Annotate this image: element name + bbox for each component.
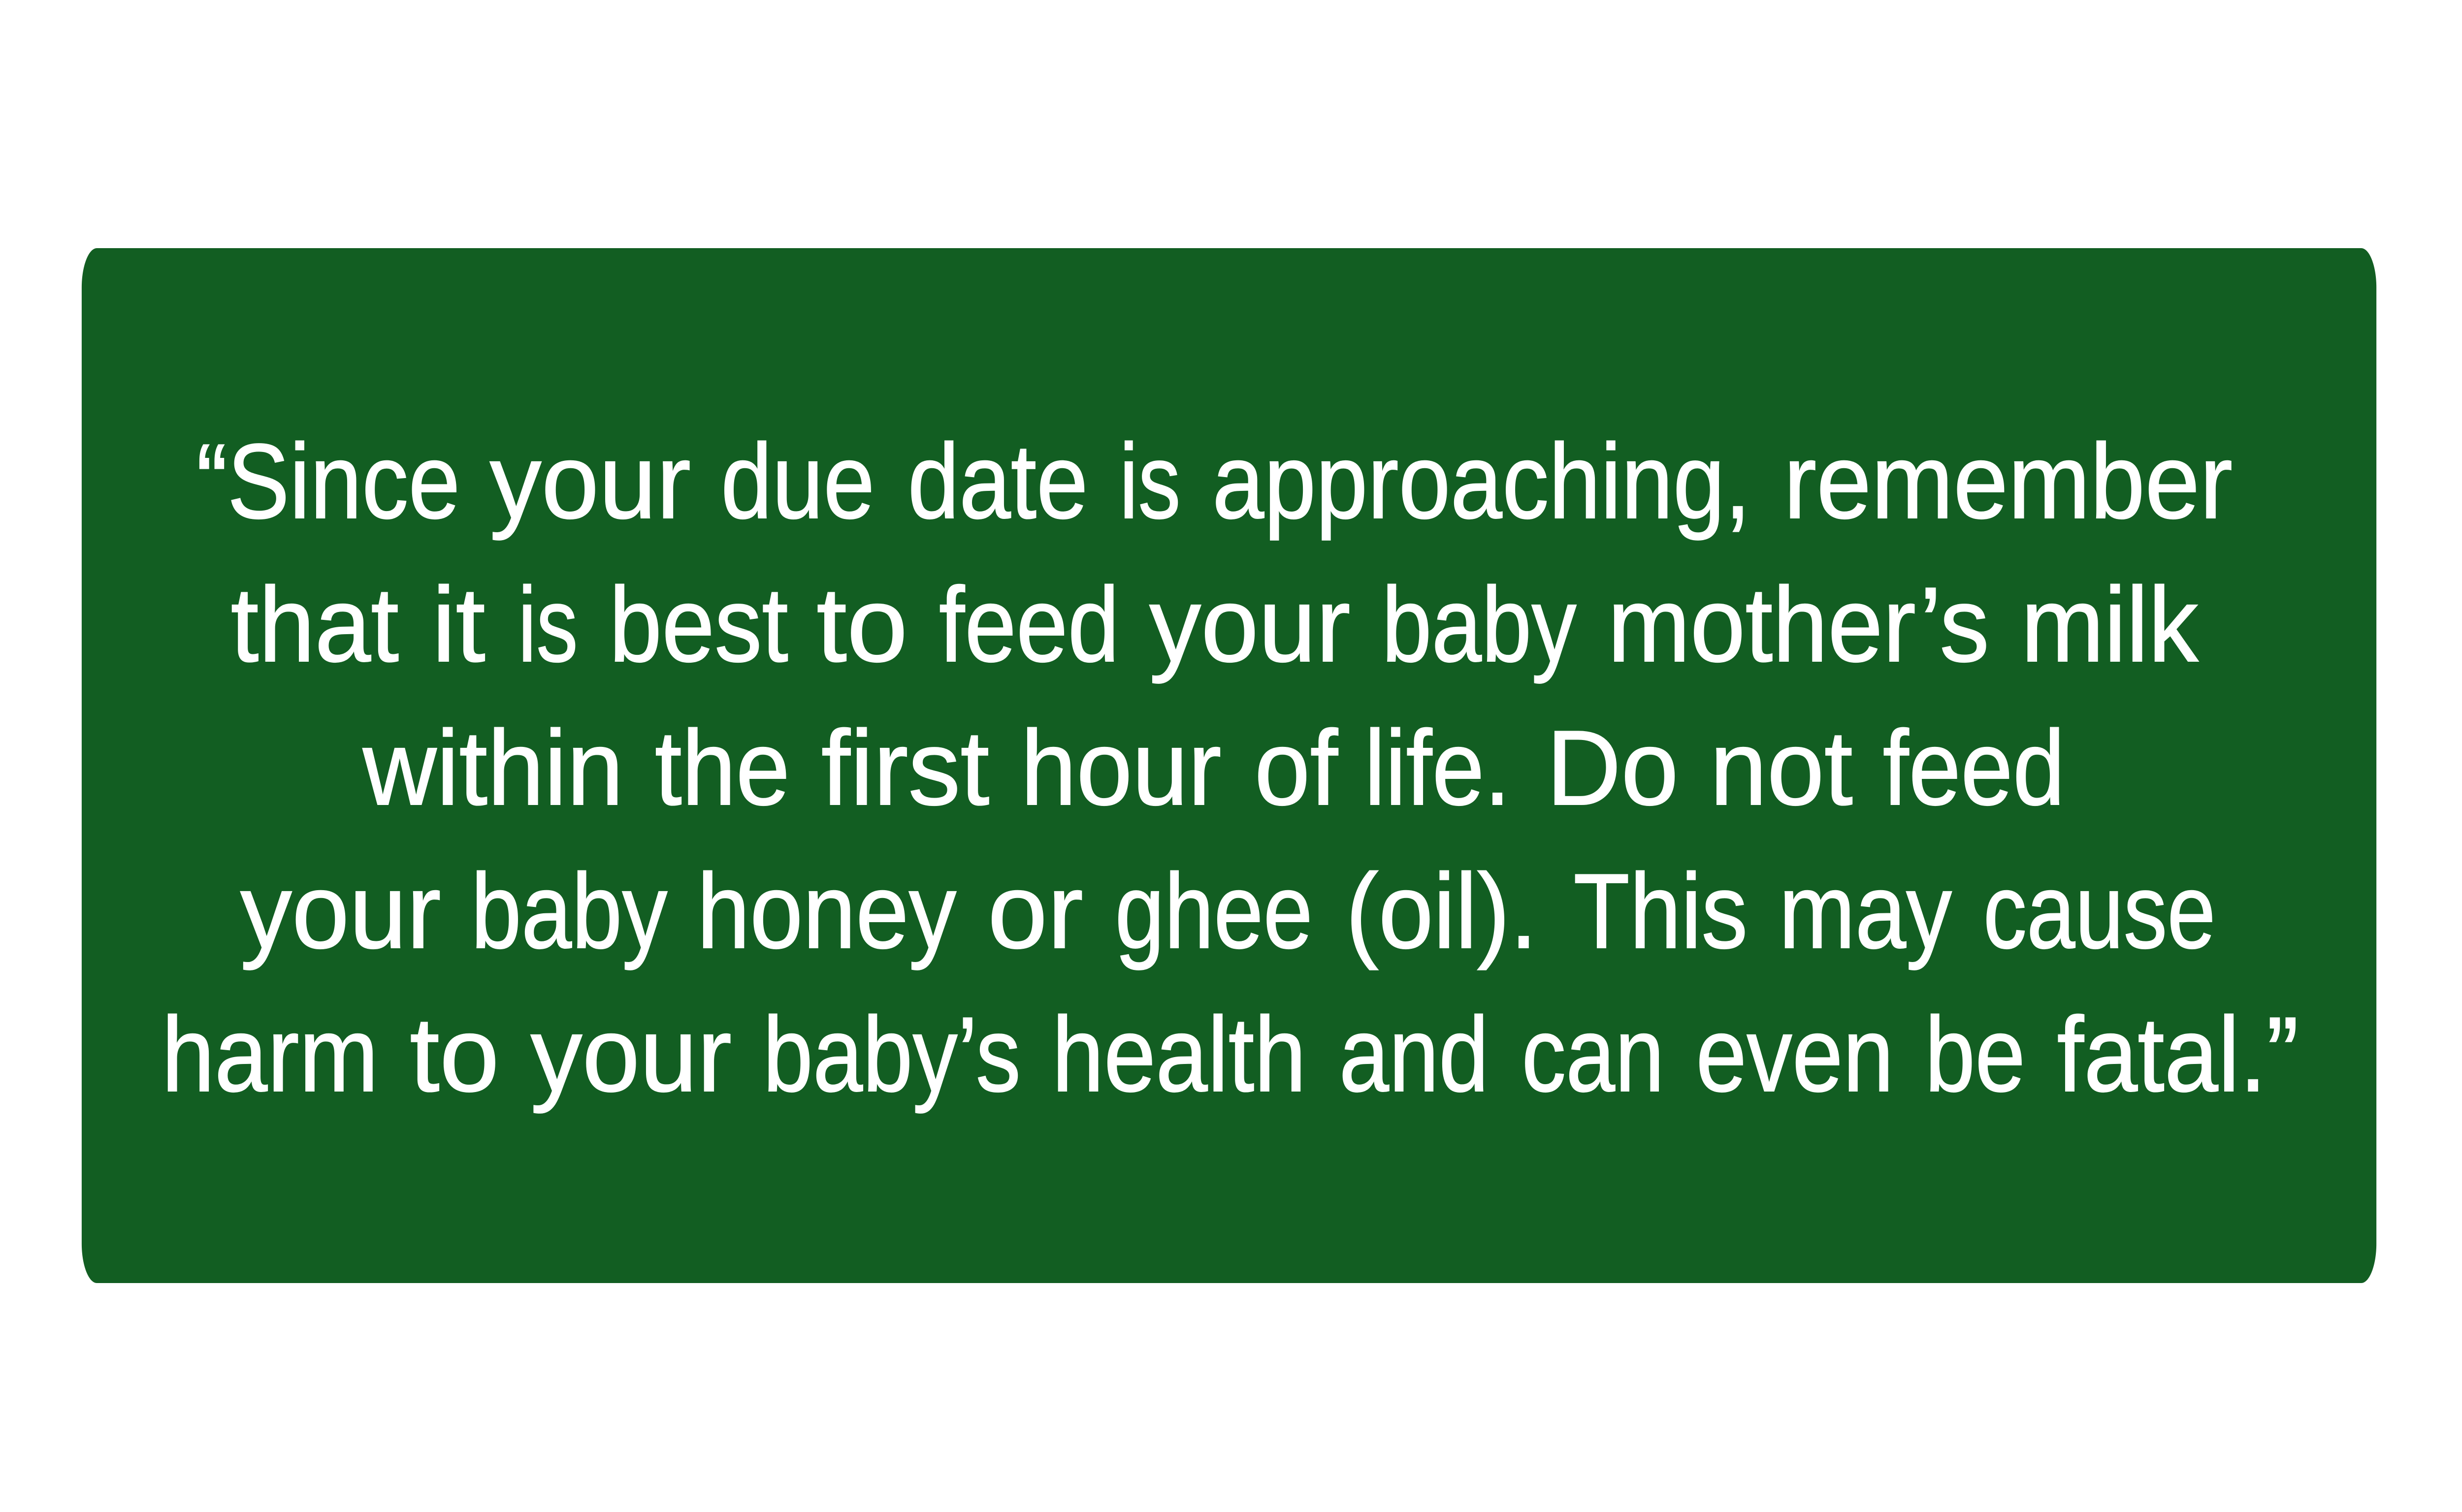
quote line 1: date xyxy=(907,422,1088,541)
quote line 2: that xyxy=(231,566,399,684)
quote line 4: your xyxy=(240,852,441,971)
quote line 4: baby xyxy=(471,852,668,971)
quote line 5: health xyxy=(1052,996,1306,1114)
quote line 1: is xyxy=(1119,422,1181,541)
quote line 1: remember xyxy=(1783,422,2233,541)
quote line 4: ghee xyxy=(1115,852,1313,971)
quote line 2: best xyxy=(609,566,788,684)
quote line 3: within xyxy=(362,709,623,828)
quote line 2: it xyxy=(432,566,486,684)
quote line 1: approaching, xyxy=(1212,422,1750,541)
quote line 3: first xyxy=(821,709,989,828)
quote line 5: and xyxy=(1339,996,1489,1114)
quote line 4: or xyxy=(988,852,1083,971)
quote line 5: even xyxy=(1696,996,1894,1114)
quote line 1: your xyxy=(490,422,691,541)
quote line 2: mother’s xyxy=(1608,566,1989,684)
quote line 5: your xyxy=(530,996,732,1114)
quote line 5: baby’s xyxy=(763,996,1021,1114)
quote line 2: milk xyxy=(2021,566,2199,684)
quote line 5: fatal.” xyxy=(2057,996,2299,1114)
quote line 2: your xyxy=(1149,566,1351,684)
quote line 2: feed xyxy=(939,566,1119,684)
quote line 3: of xyxy=(1255,709,1338,828)
quote line 3: the xyxy=(655,709,790,828)
quote line 4 xyxy=(240,852,2216,971)
quote line 2: to xyxy=(816,566,907,684)
quote line 1: due xyxy=(721,422,875,541)
quote line 4: honey xyxy=(697,852,956,971)
quote line 3: hour xyxy=(1021,709,1222,828)
quote line 5: to xyxy=(410,996,499,1114)
quote line 2: baby xyxy=(1382,566,1577,684)
quote line 5: be xyxy=(1925,996,2025,1114)
quote line 4: cause xyxy=(1983,852,2216,971)
quote text xyxy=(162,422,2299,1114)
quote line 3: life. xyxy=(1364,709,1510,828)
quote line 3: not xyxy=(1710,709,1853,828)
quote line 2: is xyxy=(518,566,578,684)
quote line 5: harm xyxy=(162,996,379,1114)
quote line 2 xyxy=(231,566,2199,684)
quote line 5: can xyxy=(1522,996,1664,1114)
quote line 3: Do xyxy=(1547,709,1679,828)
quote line 1 xyxy=(196,422,2233,541)
quote line 3: feed xyxy=(1883,709,2065,828)
quote line 1: “Since xyxy=(196,422,460,541)
quote line 4: (oil). xyxy=(1346,852,1537,971)
panel: green quote box xyxy=(82,248,2376,1283)
quote line 3 xyxy=(362,709,2065,828)
quote line 4: This xyxy=(1573,852,1748,971)
quote line 4: may xyxy=(1779,852,1952,971)
quote line 5 xyxy=(162,996,2299,1114)
